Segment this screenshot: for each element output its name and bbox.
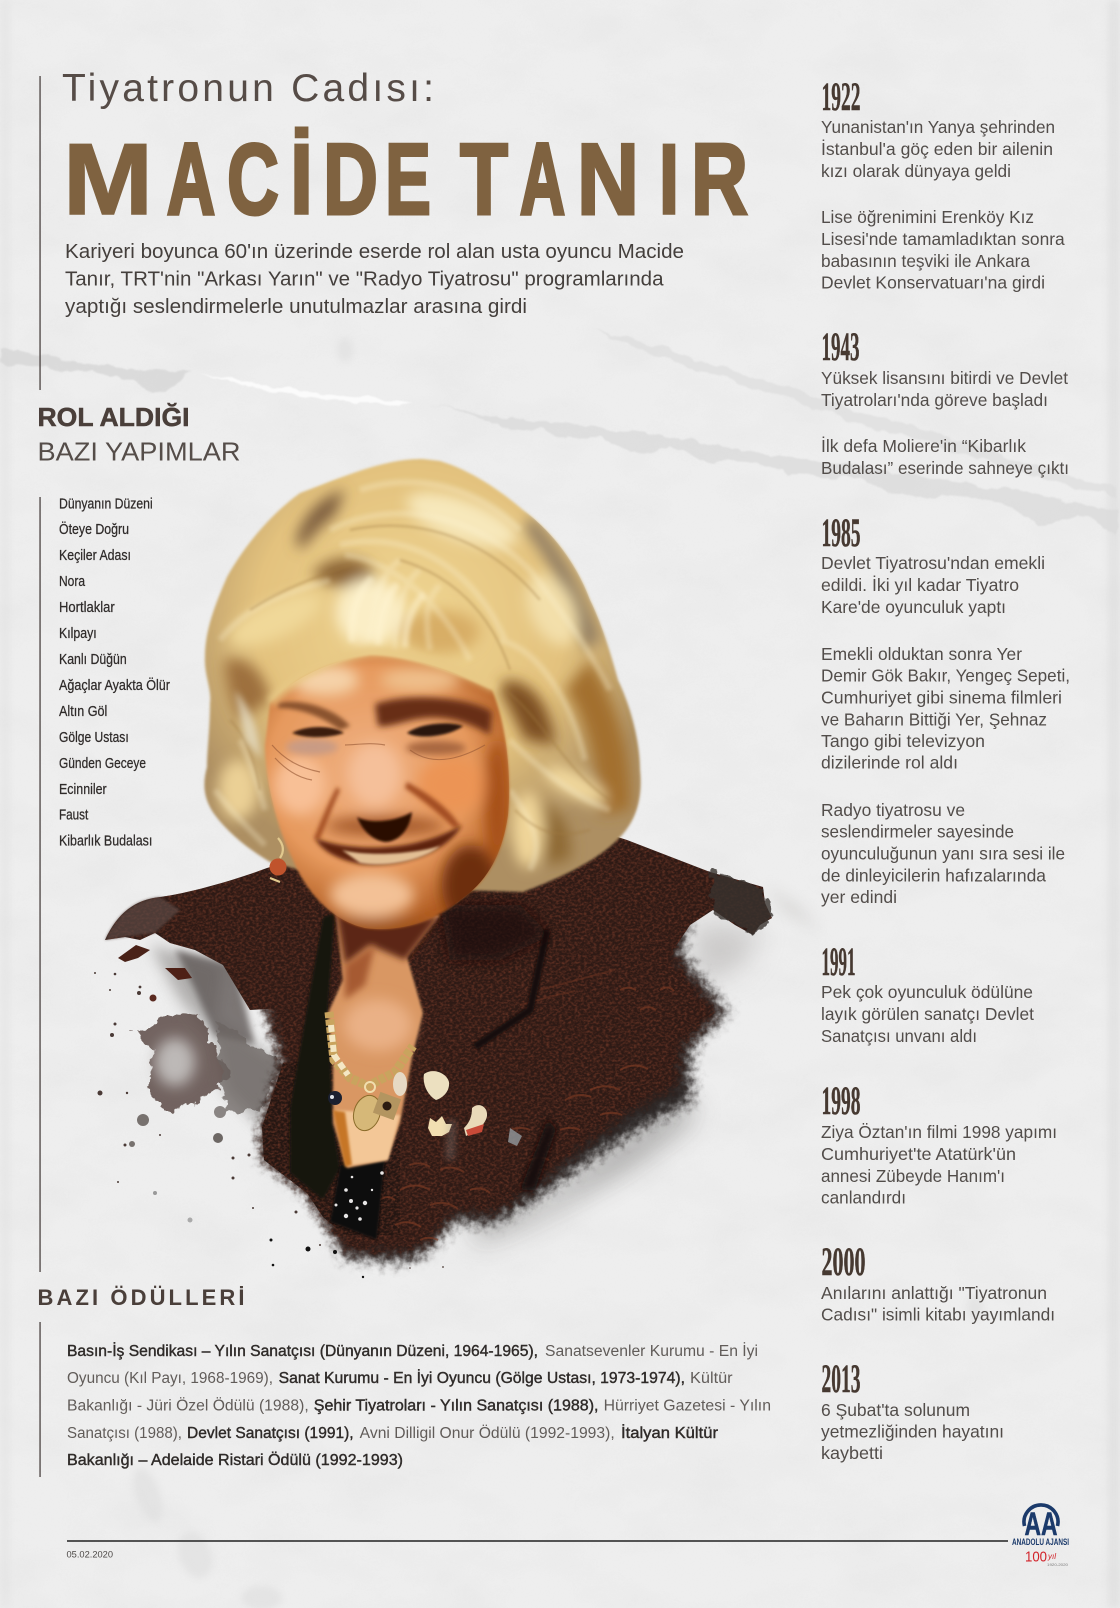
timeline: 1943: 1943 [822, 324, 860, 369]
title: Macide Tanır: A [520, 124, 565, 236]
timeline: 1943 [821, 324, 1069, 478]
necklace and pins [328, 1012, 522, 1160]
logo: Anadolu Ajansı: ANADOLU AJANSI [1012, 1537, 1069, 1547]
timeline: 1985: Radyo tiyatrosu ve [821, 800, 965, 820]
timeline: 1922: kızı olarak dünyaya geldi [821, 161, 1011, 181]
awards text: Kültür [690, 1370, 733, 1387]
timeline: 1985 [821, 510, 1070, 907]
heading: Rol aldığı bazı yapımlar: BAZI YAPIMLAR [38, 436, 240, 466]
logo: Anadolu Ajansı [1012, 1505, 1069, 1567]
timeline: 2000 [821, 1239, 1055, 1324]
heading: Rol aldığı bazı yapımlar: ROL ALDIĞI [38, 402, 190, 432]
paint splatter [94, 972, 444, 1278]
timeline: 1985: Devlet Tiyatrosu'ndan emekli [821, 553, 1045, 573]
list: productions: Öteye Doğru [59, 520, 129, 538]
timeline: 1943: Budalası” eserinde sahneye çıktı [821, 458, 1069, 478]
timeline: 1998: annesi Zübeyde Hanım'ı [821, 1166, 1005, 1186]
timeline: 1985: edildi. İki yıl kadar Tiyatro [821, 575, 1019, 595]
awards text: Hürriyet Gazetesi - Yılın [604, 1398, 771, 1415]
timeline: 1991: layık görülen sanatçı Devlet [821, 1004, 1034, 1024]
list: productions: Kanlı Düğün [59, 652, 127, 668]
lapel and black scarf [290, 905, 556, 1240]
intro text: Tanır, TRT'nin "Arkası Yarın" ve "Radyo Tiyatrosu" programlarında [65, 268, 664, 290]
timeline: 1985: Cumhuriyet gibi sinema filmleri [821, 688, 1062, 708]
timeline: 1943: İlk defa Moliere'in “Kibarlık [821, 436, 1026, 456]
jacket sequin pattern [380, 970, 674, 1240]
timeline: 2013: kaybetti [821, 1443, 883, 1463]
title: Macide Tanır: R [691, 124, 748, 236]
list: productions: Altın Göl [59, 704, 107, 720]
awards text: Bakanlığı - Jüri Özel Ödülü (1988), [67, 1397, 309, 1415]
awards text: Devlet Sanatçısı (1991), [187, 1425, 354, 1442]
intro text [65, 241, 684, 318]
timeline: 1922: İstanbul'a göç eden bir ailenin [821, 139, 1053, 159]
timeline: 1985: seslendirmeler sayesinde [821, 822, 1014, 842]
awards text: Avni Dilligil Onur Ödülü (1992-1993), [360, 1424, 615, 1442]
heading: Bazı ödülleri: BAZI ÖDÜLLERİ [38, 1285, 244, 1310]
ink wash and shadows behind jacket [133, 885, 820, 1240]
list: productions: Faust [59, 808, 88, 824]
timeline: 1998: Cumhuriyet'te Atatürk'ün [821, 1144, 1016, 1164]
awards text: Sanatsevenler Kurumu - En İyi [545, 1342, 758, 1360]
nose and smile lines [314, 787, 340, 840]
timeline: 1922: Lise öğrenimini Erenköy Kız [821, 207, 1034, 227]
title: Tiyatronun Cadısı: Tiyatronun Cadısı: [62, 67, 434, 110]
title: Macide Tanır: M [63, 124, 153, 236]
timeline: 1943: Yüksek lisansını bitirdi ve Devlet [821, 368, 1068, 388]
timeline: 2000: Anılarını anlattığı "Tiyatronun [821, 1283, 1047, 1303]
awards text: Sanat Kurumu - En İyi Oyuncu (Gölge Ustası, 1973-1974), [279, 1369, 685, 1387]
timeline: 1985: oyunculuğunun yanı sıra sesi ile [821, 844, 1065, 864]
logo: Anadolu Ajansı: yıl [1047, 1552, 1056, 1561]
timeline: 1985: ve Baharın Bittiği Yer, Şehnaz [821, 709, 1047, 729]
timeline: 1985: 1985 [822, 510, 860, 555]
timeline: 1985: Demir Gök Bakır, Yengeç Sepeti, [821, 666, 1070, 686]
list: productions: Hortlaklar [59, 600, 115, 616]
rule: awards [39, 1322, 41, 1477]
timeline: 2000: 2000 [822, 1239, 866, 1284]
awards text: Oyuncu (Kıl Payı, 1968-1969), [67, 1370, 273, 1387]
timeline: 1985: Tango gibi televizyon [821, 731, 985, 751]
timeline: 1991: Pek çok oyunculuk ödülüne [821, 982, 1033, 1002]
footer rule [67, 1540, 1008, 1542]
jacket [105, 800, 772, 1262]
rule: productions list [39, 497, 41, 1272]
list: productions: Ecinniler [59, 782, 107, 798]
timeline: 1985: Kare'de oyunculuk yaptı [821, 597, 1006, 617]
icon: earring [270, 838, 286, 882]
face [265, 651, 509, 942]
timeline: 2013 [821, 1356, 1004, 1463]
timeline: 1985: yer edindi [821, 887, 897, 907]
timeline: 1922 [821, 74, 1065, 292]
logo: Anadolu Ajansı: 1920-2020 [1047, 1562, 1069, 1567]
timeline: 2013: 2013 [822, 1356, 860, 1401]
title: Macide Tanır: I [658, 124, 680, 236]
timeline: 1922: Devlet Konservatuarı'na girdi [821, 272, 1045, 292]
timeline: 1922: Yunanistan'ın Yanya şehrinden [821, 117, 1055, 137]
timeline: 1943: Tiyatroları'nda göreve başladı [821, 390, 1048, 410]
awards text: Basın-İş Sendikası – Yılın Sanatçısı (Dünyanın Düzeni, 1964-1965), [67, 1342, 538, 1360]
mouth [315, 825, 462, 865]
awards text: İtalyan Kültür [621, 1424, 718, 1442]
timeline: 1998: canlandırdı [821, 1188, 906, 1208]
timeline column [821, 74, 1070, 1463]
portrait: Macide Tanır [94, 459, 820, 1278]
hair [204, 459, 641, 892]
awards text: Sanatçısı (1988), [67, 1425, 182, 1442]
timeline: 1991: 1991 [822, 939, 856, 984]
timeline: 1991 [821, 939, 1034, 1046]
title: Macide Tanır: E [385, 124, 431, 236]
timeline: 1998: Ziya Öztan'ın filmi 1998 yapımı [821, 1122, 1057, 1142]
intro text: yaptığı seslendirmelerle unutulmazlar arasına girdi [65, 296, 527, 318]
title: Macide Tanır: N [577, 124, 639, 236]
heading: Rol aldığı bazı yapımlar [38, 402, 240, 466]
timeline: 1985: dizilerinde rol aldı [821, 753, 958, 773]
logo: Anadolu Ajansı: 100 [1025, 1548, 1047, 1566]
neck and chest [328, 905, 440, 1168]
title: Macide Tanır: İ [289, 124, 314, 236]
list: productions: Nora [59, 574, 86, 590]
title: Macide Tanır: A [167, 124, 215, 236]
list: productions [59, 496, 170, 850]
footer date: 05.02.2020 [66, 1550, 113, 1560]
list: productions: Gölge Ustası [59, 730, 129, 746]
title: Macide Tanır: T [460, 124, 508, 236]
timeline: 1998: 1998 [822, 1078, 860, 1123]
list: productions: Günden Geceye [59, 756, 146, 772]
timeline: 1922: babasının teşviki ile Ankara [821, 251, 1030, 271]
title: Macide Tanır: D [323, 124, 378, 236]
list: productions: Kılpayı [59, 626, 97, 642]
title: Macide Tanır: C [227, 124, 279, 236]
list: productions: Keçiler Adası [59, 548, 131, 564]
timeline: 2013: 6 Şubat'ta solunum [821, 1400, 970, 1420]
brows and eye sockets [375, 697, 492, 735]
timeline: 1922: 1922 [822, 74, 860, 119]
list: productions: Kibarlık Budalası [59, 834, 152, 850]
awards text: Bakanlığı – Adelaide Ristari Ödülü (1992-1993) [67, 1451, 403, 1469]
list: productions: Ağaçlar Ayakta Ölür [59, 676, 170, 694]
logo: Anadolu Ajansı: AA [1024, 1506, 1058, 1542]
awards text: Şehir Tiyatroları - Yılın Sanatçısı (1988), [314, 1398, 598, 1415]
timeline: 1922: Lisesi'nde tamamladıktan sonra [821, 229, 1065, 249]
rule: title section [39, 76, 41, 390]
timeline: 1985: de dinleyicilerin hafızalarında [821, 866, 1046, 886]
timeline: 1991: Sanatçısı unvanı aldı [821, 1026, 977, 1046]
intro text: Kariyeri boyunca 60'ın üzerinde eserde rol alan usta oyuncu Macide [65, 241, 684, 263]
awards text [67, 1342, 771, 1469]
timeline: 2013: yetmezliğinden hayatını [821, 1422, 1004, 1442]
list: productions: Dünyanın Düzeni [59, 496, 153, 512]
timeline: 1985: Emekli olduktan sonra Yer [821, 644, 1022, 664]
timeline: 2000: Cadısı" isimli kitabı yayımlandı [821, 1304, 1055, 1324]
timeline: 1998 [821, 1078, 1057, 1208]
